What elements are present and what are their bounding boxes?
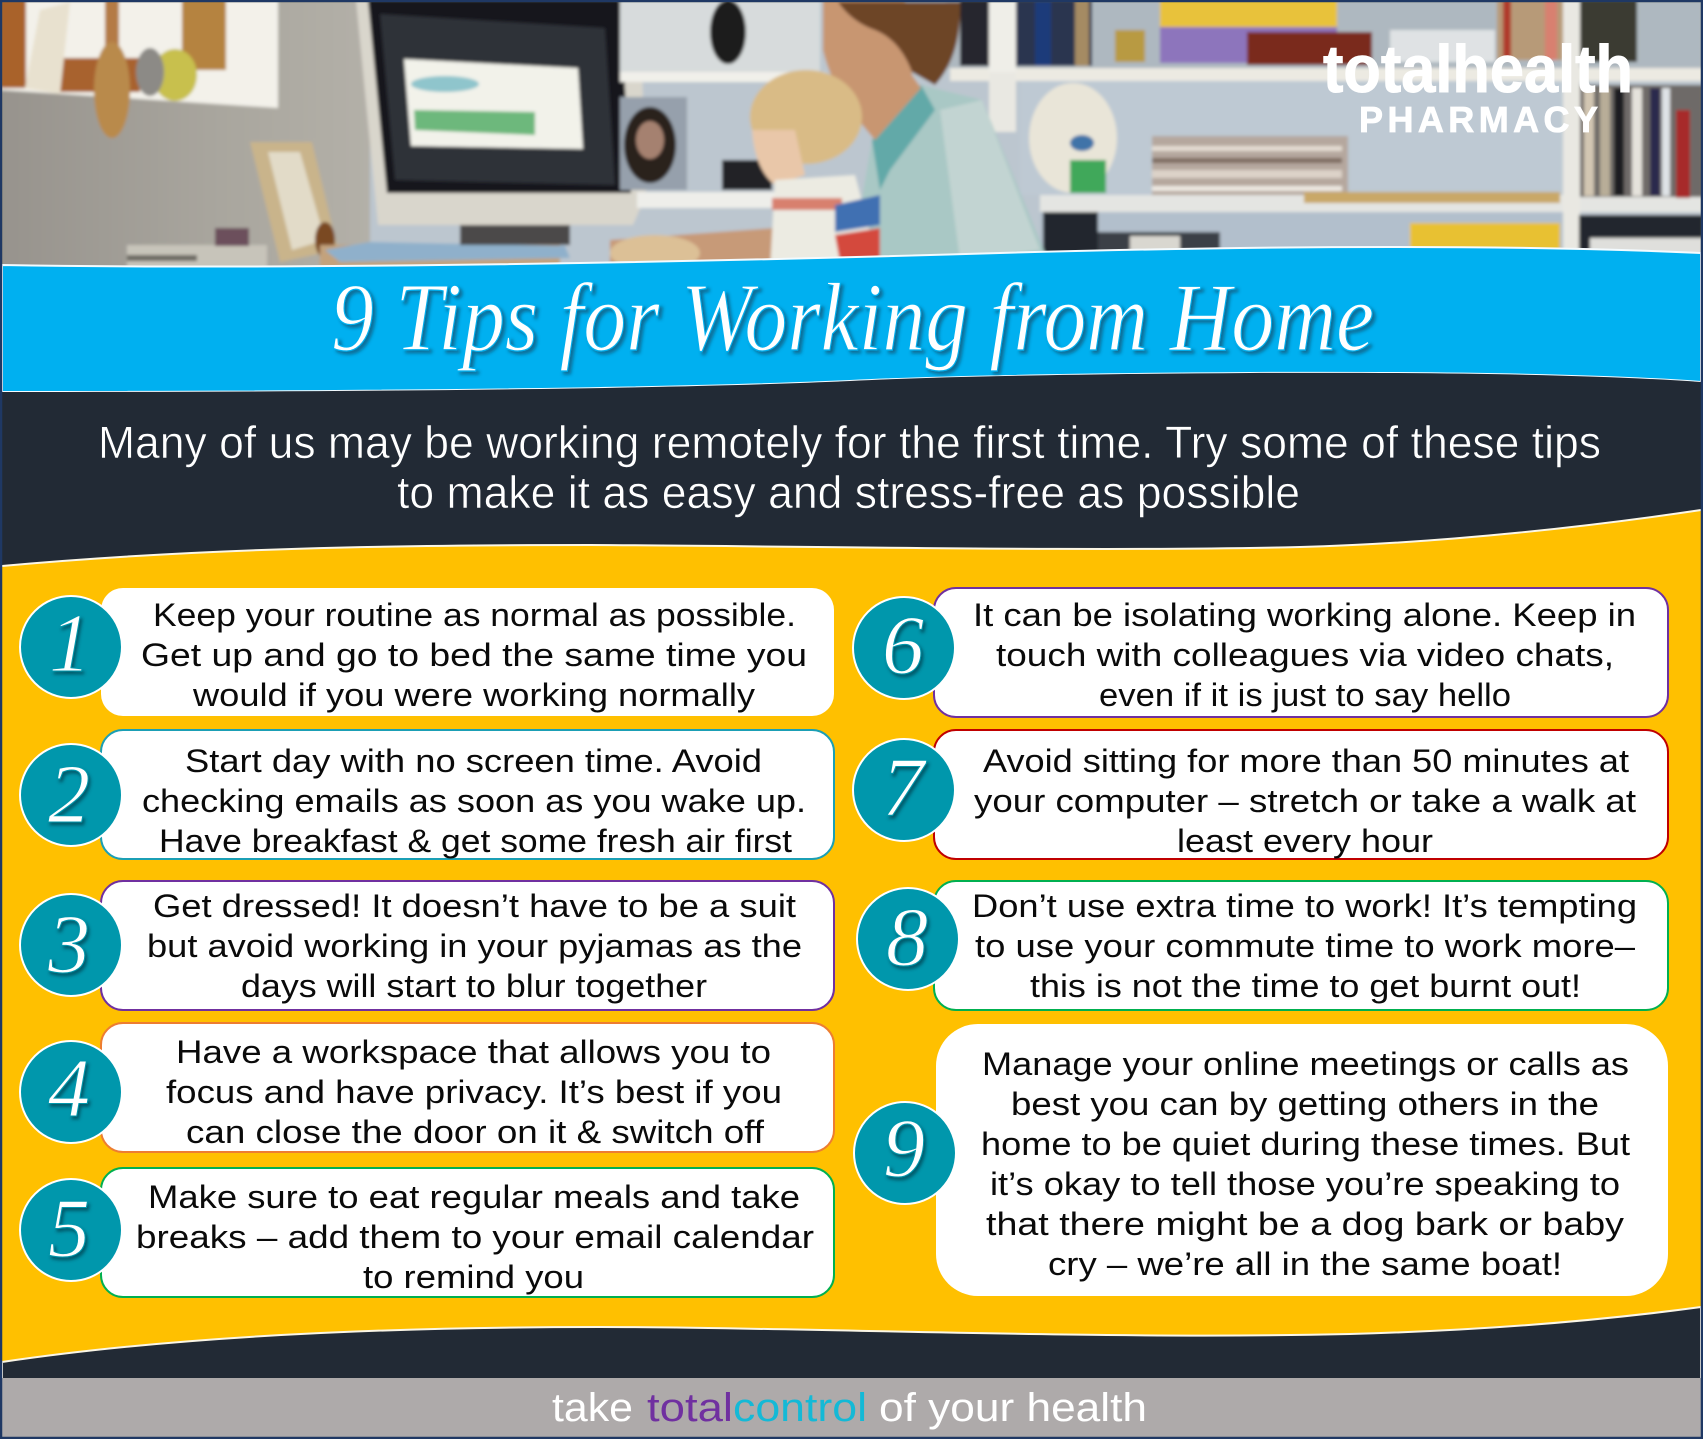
dark footer wave xyxy=(2,1307,1701,1380)
logo: totalhealth pharmacy: PHARMACY xyxy=(1359,99,1598,140)
tip 6 xyxy=(853,588,1668,717)
tip 8 text: this is not the time to get burnt out! xyxy=(1030,968,1581,1004)
tip 3 box xyxy=(101,881,834,1010)
tip 2 box xyxy=(101,730,834,859)
tip 8 box xyxy=(934,881,1668,1010)
tip 8 text: Don’t use extra time to work! It’s tempting xyxy=(972,888,1637,924)
tip 2 text: Start day with no screen time. Avoid xyxy=(185,743,762,779)
tip 5 text: breaks – add them to your email calendar xyxy=(136,1219,814,1255)
intro text: Many of us may be working remotely for the first time. Try some of these tips xyxy=(98,417,1601,468)
title: 9 Tips for Working from Home xyxy=(331,264,1374,372)
tip 4 number badge xyxy=(20,1041,122,1143)
tip 9 xyxy=(854,1024,1668,1296)
blue title band xyxy=(2,247,1701,392)
tip 8 text: to use your commute time to work more– xyxy=(975,928,1635,964)
tip 6 box xyxy=(934,588,1668,717)
footer tagline: control xyxy=(733,1386,867,1430)
tip 5 number badge xyxy=(20,1179,122,1281)
footer tagline: take xyxy=(552,1386,633,1430)
tip 9 text: Manage your online meetings or calls as xyxy=(982,1046,1629,1082)
tip 5 number badge: 5 xyxy=(48,1182,90,1275)
tip 3 text: Get dressed! It doesn’t have to be a suit xyxy=(153,888,796,924)
tip 1 box xyxy=(101,588,834,716)
tip 1 text: Keep your routine as normal as possible. xyxy=(153,597,796,633)
tip 7 text: your computer – stretch or take a walk at xyxy=(974,783,1636,819)
tip 4 number badge: 4 xyxy=(48,1042,90,1135)
tip 2 xyxy=(20,730,834,859)
tip 2 text xyxy=(142,743,806,859)
tip 9 text: cry – we’re all in the same boat! xyxy=(1048,1246,1562,1282)
footer tagline: total xyxy=(647,1386,733,1430)
tip 2 number badge: 2 xyxy=(48,748,90,841)
tip 4 text: Have a workspace that allows you to xyxy=(176,1034,771,1070)
tip 9 box xyxy=(936,1024,1668,1296)
tip 7 text xyxy=(974,743,1636,859)
footer tagline xyxy=(552,1386,1147,1430)
tip 9 text: best you can by getting others in the xyxy=(1011,1086,1599,1122)
footer bar xyxy=(2,1378,1701,1437)
tip 7 text: Avoid sitting for more than 50 minutes at xyxy=(983,743,1629,779)
tip 7 number badge: 7 xyxy=(882,741,927,834)
tip 9 number badge: 9 xyxy=(883,1102,925,1195)
photo: father and child at computer xyxy=(0,0,1703,271)
tip 3 xyxy=(20,881,834,1010)
yellow/dark divider line xyxy=(2,510,1701,566)
tip 5 text: to remind you xyxy=(363,1259,584,1295)
dark intro band xyxy=(2,373,1701,566)
tip 5 box xyxy=(101,1168,834,1297)
logo: totalhealth pharmacy: totalhealth xyxy=(1323,32,1633,107)
tip 6 number badge xyxy=(853,597,955,699)
tip 3 number badge: 3 xyxy=(47,898,90,991)
tip 2 text: checking emails as soon as you wake up. xyxy=(142,783,806,819)
tip 3 text: days will start to blur together xyxy=(241,968,707,1004)
tip 2 number badge xyxy=(20,744,122,846)
tip 2 text: Have breakfast & get some fresh air first xyxy=(159,823,792,859)
tip 6 text: touch with colleagues via video chats, xyxy=(996,637,1614,673)
tip 6 text: even if it is just to say hello xyxy=(1099,677,1511,713)
tip 3 text xyxy=(147,888,802,1004)
tip 6 text xyxy=(973,597,1636,713)
tip 8 text xyxy=(972,888,1637,1004)
tip 9 text: that there might be a dog bark or baby xyxy=(986,1206,1624,1242)
tip 6 text: It can be isolating working alone. Keep in xyxy=(973,597,1636,633)
tip 3 number badge xyxy=(20,894,122,996)
tip 9 text: home to be quiet during these times. But xyxy=(981,1126,1630,1162)
tip 4 text xyxy=(166,1034,782,1150)
footer tagline: of your health xyxy=(879,1386,1147,1430)
tip 8 xyxy=(857,881,1668,1010)
tip 8 number badge: 8 xyxy=(886,891,928,984)
tip 4 text: can close the door on it & switch off xyxy=(186,1114,764,1150)
tip 1 number badge xyxy=(20,596,122,698)
logo: totalhealth pharmacy xyxy=(1323,32,1633,140)
tip 9 number badge xyxy=(854,1102,956,1204)
tip 1 text xyxy=(141,597,807,713)
tip 1 xyxy=(20,588,834,716)
tip 9 text xyxy=(981,1046,1630,1282)
tip 5 text xyxy=(136,1179,814,1295)
intro text xyxy=(98,417,1601,518)
tip 6 number badge: 6 xyxy=(882,599,924,692)
tip 8 number badge xyxy=(857,888,959,990)
tip 4 text: focus and have privacy. It’s best if you xyxy=(166,1074,782,1110)
tip 1 number badge: 1 xyxy=(49,597,91,690)
tip 9 text: it’s okay to tell those you’re speaking to xyxy=(990,1166,1620,1202)
tip 1 text: would if you were working normally xyxy=(192,677,755,713)
tip 7 number badge xyxy=(853,739,955,841)
tip 4 xyxy=(20,1023,834,1152)
tip 4 box xyxy=(101,1023,834,1152)
intro text: to make it as easy and stress-free as possible xyxy=(397,467,1300,518)
tip 3 text: but avoid working in your pyjamas as the xyxy=(147,928,802,964)
tip 5 xyxy=(20,1168,834,1297)
tip 5 text: Make sure to eat regular meals and take xyxy=(148,1179,800,1215)
tip 1 text: Get up and go to bed the same time you xyxy=(141,637,807,673)
tip 7 xyxy=(853,730,1668,859)
tip 7 box xyxy=(934,730,1668,859)
tip 7 text: least every hour xyxy=(1177,823,1433,859)
